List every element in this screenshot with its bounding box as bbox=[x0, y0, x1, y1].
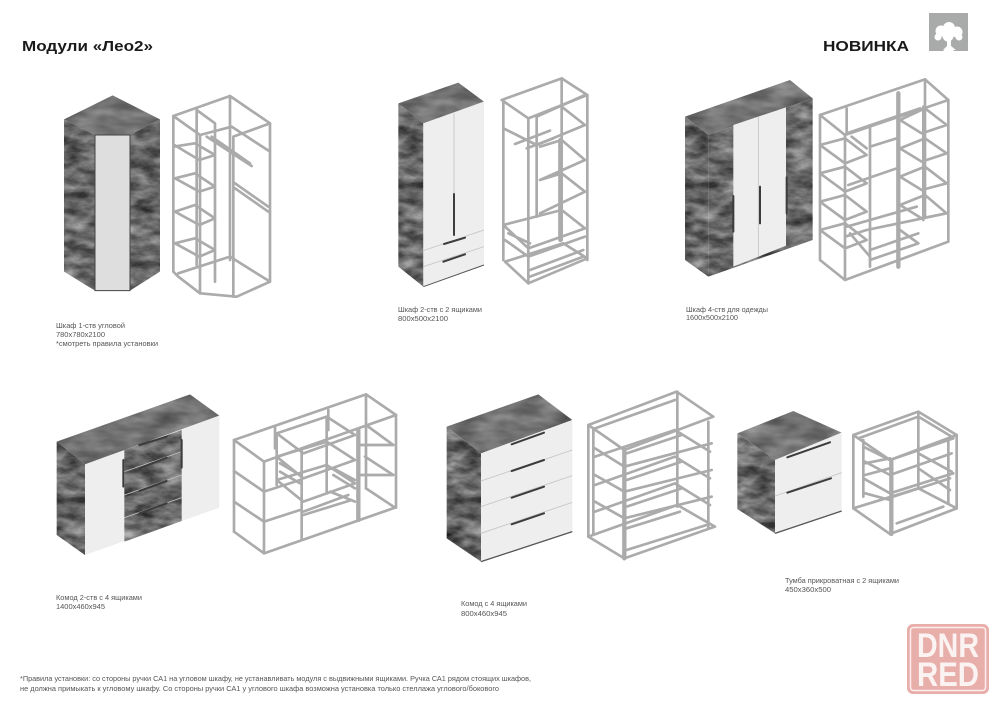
module: 4-door wardrobe bbox=[685, 79, 948, 280]
caption: 2-door wardrobe: Шкаф 2-ств с 2 ящиками bbox=[398, 305, 482, 314]
watermark: DNR RED: DNR bbox=[917, 627, 979, 665]
cabinet render: 4-door wardrobe bbox=[685, 80, 813, 277]
wireframe: bedside table bbox=[853, 412, 957, 534]
cabinet render: chest of 4 drawers bbox=[447, 394, 572, 562]
module: 2-door chest bbox=[57, 394, 396, 555]
wireframe: chest of 4 drawers bbox=[588, 392, 715, 558]
badge: new: НОВИНКА bbox=[823, 39, 910, 55]
module: 2-door wardrobe bbox=[398, 78, 587, 287]
watermark: DNR RED: RED bbox=[917, 656, 979, 694]
wireframe: 2-door wardrobe bbox=[502, 78, 587, 283]
caption: 4-door wardrobe bbox=[686, 305, 768, 322]
caption: corner wardrobe: *смотреть правила установки bbox=[56, 339, 158, 348]
module: bedside table bbox=[737, 411, 957, 534]
cabinet render: 2-door wardrobe bbox=[398, 83, 484, 287]
footnote: installation rules: *Правила установки: со стороны ручки СА1 на угловом шкафу, не устанавливать модуля с выдвижными ящиками. Ручка СА1 рядом стоящих шкафов, bbox=[20, 674, 531, 683]
caption: 2-door chest: Комод 2-ств с 4 ящиками bbox=[56, 593, 142, 602]
caption: chest of 4 drawers: Комод с 4 ящиками bbox=[461, 599, 527, 608]
caption: bedside table bbox=[785, 576, 899, 594]
caption: corner wardrobe: 780х780х2100 bbox=[56, 330, 105, 339]
watermark: DNR RED bbox=[907, 624, 989, 694]
caption: 2-door chest: 1400х460х945 bbox=[56, 602, 105, 611]
caption: chest of 4 drawers bbox=[461, 599, 527, 618]
caption: corner wardrobe bbox=[56, 321, 158, 348]
caption: bedside table: Тумба прикроватная с 2 ящиками bbox=[785, 576, 899, 585]
caption: 4-door wardrobe: Шкаф 4-ств для одежды bbox=[686, 305, 768, 314]
module: corner wardrobe bbox=[64, 95, 270, 297]
wireframe: corner wardrobe bbox=[173, 96, 270, 297]
icon: tree logo bbox=[929, 13, 968, 51]
caption: bedside table: 450х360х500 bbox=[785, 585, 831, 594]
module: chest of 4 drawers bbox=[447, 392, 715, 562]
title: Модули «Лео2» bbox=[22, 39, 153, 55]
footnote: installation rules bbox=[20, 674, 531, 693]
wireframe: 4-door wardrobe bbox=[820, 79, 948, 280]
caption: 2-door wardrobe bbox=[398, 305, 482, 323]
cabinet render: corner wardrobe bbox=[64, 95, 160, 291]
wireframe: 2-door chest bbox=[234, 394, 396, 553]
caption: 4-door wardrobe: 1600х500х2100 bbox=[686, 313, 738, 322]
cabinet render: bedside table bbox=[737, 411, 842, 533]
caption: corner wardrobe: Шкаф 1-ств угловой bbox=[56, 321, 125, 330]
footnote: installation rules: не должна примыкать к угловому шкафу. Со стороны ручки СА1 у углового шкафа возможна установка только стеллажа углового/бокового bbox=[20, 684, 499, 693]
caption: 2-door chest bbox=[56, 593, 142, 611]
cabinet render: 2-door chest bbox=[57, 394, 219, 555]
caption: chest of 4 drawers: 800х460х945 bbox=[461, 609, 507, 618]
caption: 2-door wardrobe: 800х500х2100 bbox=[398, 314, 448, 323]
